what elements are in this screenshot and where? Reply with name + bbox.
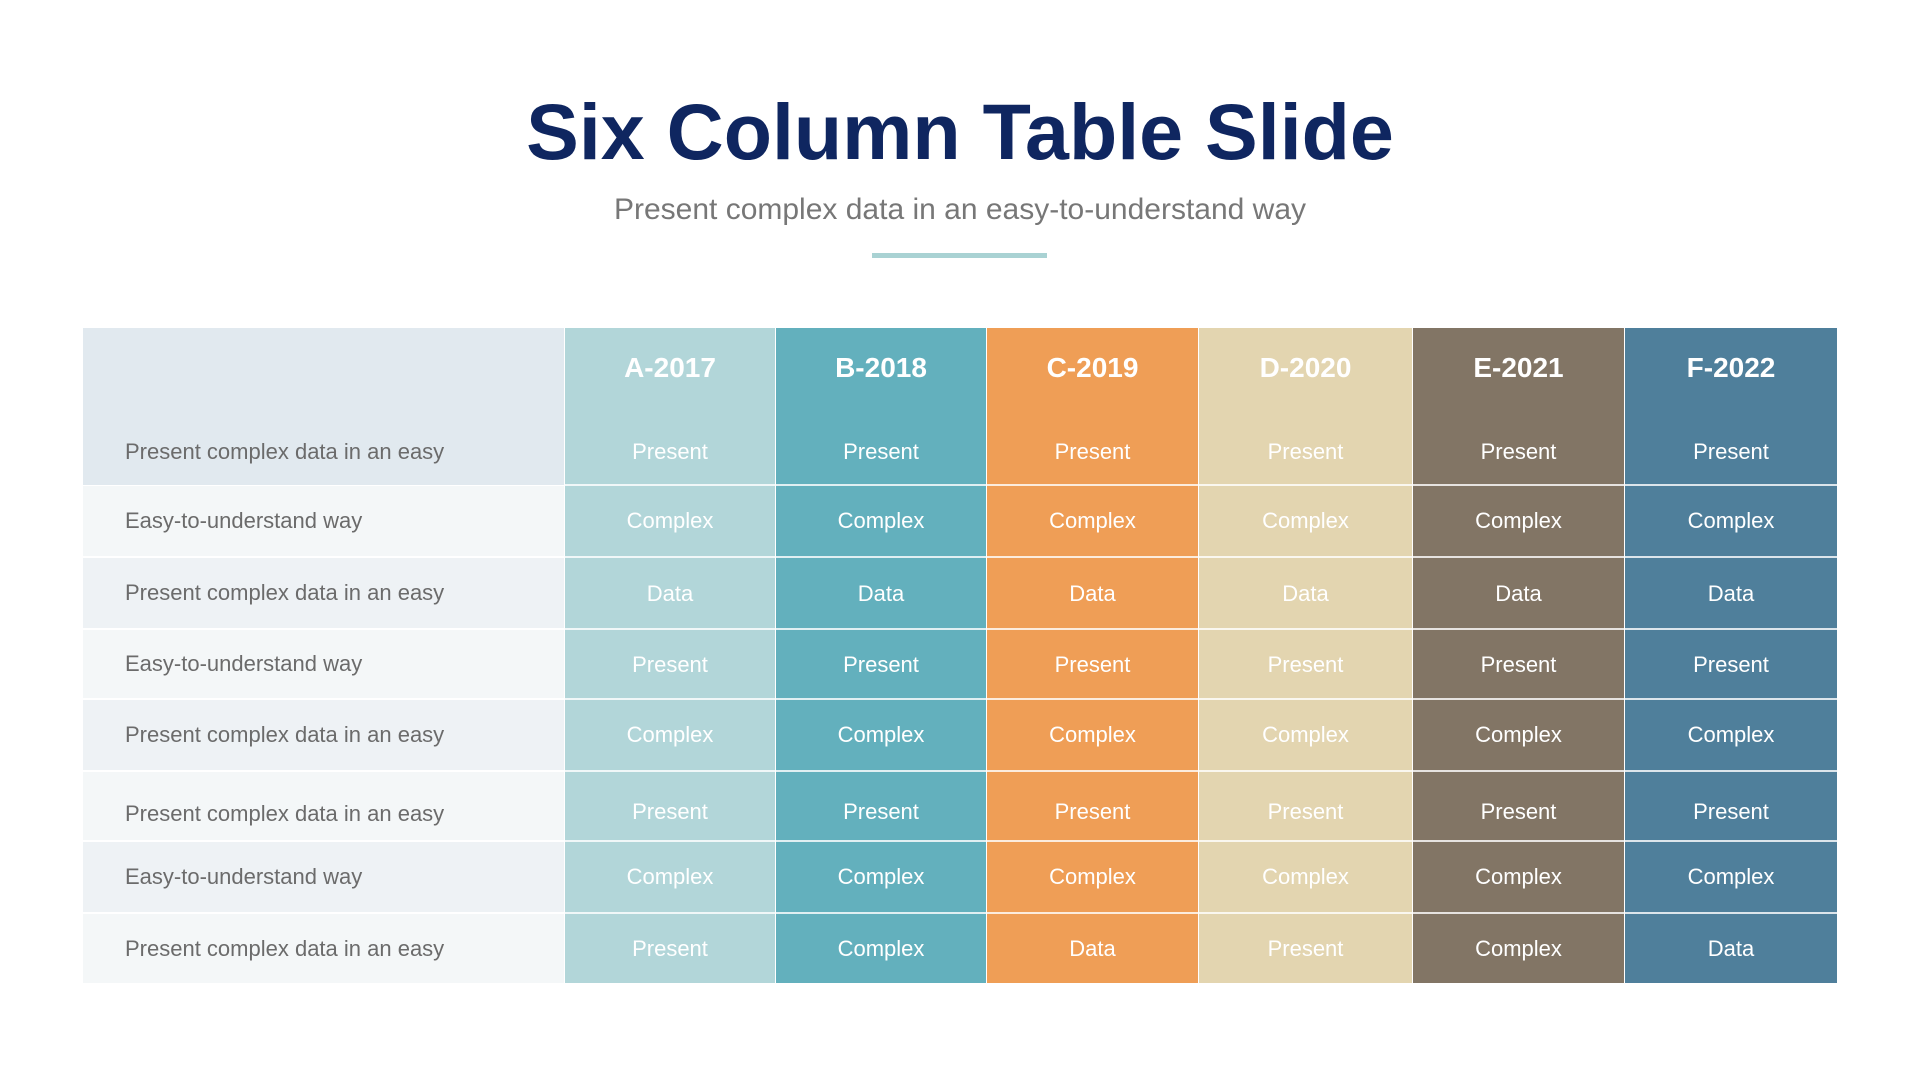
text: Present — [1268, 936, 1343, 961]
label column: Easy-to-understand way — [125, 508, 362, 533]
text: Present — [1055, 799, 1130, 824]
text: Complex — [1688, 722, 1774, 747]
column D — [1199, 328, 1412, 983]
text: Present — [632, 799, 708, 824]
column F — [1625, 328, 1837, 983]
label column: Present complex data in an easy — [125, 936, 444, 960]
text: Data — [1708, 581, 1754, 606]
text: Complex — [838, 508, 924, 533]
text: Present — [1055, 439, 1130, 464]
text: Complex — [1475, 722, 1562, 747]
label column: Present complex data in an easy — [125, 580, 444, 605]
text: Complex — [838, 936, 924, 961]
text: Present — [632, 936, 708, 961]
text: Present — [1055, 652, 1130, 677]
text: Present — [843, 652, 919, 677]
text: Complex — [627, 722, 713, 747]
label column: Present complex data in an easy — [125, 801, 444, 826]
text: Complex — [838, 722, 924, 747]
text: Complex — [1049, 508, 1136, 533]
column B — [776, 328, 986, 983]
text: Present — [1481, 799, 1556, 824]
headers: A-2017 — [624, 352, 716, 383]
label column: Easy-to-understand way — [125, 651, 362, 676]
text: Data — [1282, 581, 1329, 606]
text: Data — [858, 581, 904, 606]
label column — [83, 328, 564, 983]
headers — [624, 352, 1775, 383]
text: Data — [1069, 581, 1116, 606]
text: Present — [1481, 652, 1556, 677]
text: Complex — [1049, 864, 1136, 889]
text: Present — [1693, 439, 1769, 464]
text: Complex — [1262, 864, 1349, 889]
text: Data — [1069, 936, 1116, 961]
text: Complex — [1049, 722, 1136, 747]
text: Complex — [1688, 864, 1774, 889]
text: Present — [1693, 799, 1769, 824]
cell values — [627, 439, 1774, 961]
text: Present — [1481, 439, 1556, 464]
text: Present — [1268, 799, 1343, 824]
text: Data — [1708, 936, 1754, 961]
text: Present — [632, 652, 708, 677]
column C — [987, 328, 1198, 983]
text: Present — [632, 439, 708, 464]
text: Present — [843, 439, 919, 464]
subtitle: Present complex data in an easy-to-understand way — [614, 193, 1306, 226]
column E — [1413, 328, 1624, 983]
label column: Present complex data in an easy — [125, 439, 444, 464]
text: Present — [1693, 652, 1769, 677]
label column: Present complex data in an easy — [125, 722, 444, 747]
text: Complex — [1262, 508, 1349, 533]
text: Complex — [1475, 864, 1562, 889]
text: Present — [1268, 439, 1343, 464]
text: Complex — [1688, 508, 1774, 533]
text: Complex — [838, 864, 924, 889]
text: Complex — [627, 864, 713, 889]
label column: Easy-to-understand way — [125, 864, 362, 889]
text: Data — [1495, 581, 1542, 606]
text: Complex — [1475, 508, 1562, 533]
text: Data — [647, 581, 693, 606]
text: Complex — [1262, 722, 1349, 747]
headers: F-2022 — [1687, 352, 1775, 383]
headers: E-2021 — [1473, 352, 1564, 383]
title: Six Column Table Slide — [526, 87, 1394, 176]
column A — [565, 328, 775, 983]
text: Present — [1268, 652, 1343, 677]
text: Complex — [1475, 936, 1562, 961]
headers: B-2018 — [835, 352, 927, 383]
text: Complex — [627, 508, 713, 533]
headers: D-2020 — [1260, 352, 1351, 383]
text: Present — [843, 799, 919, 824]
headers: C-2019 — [1047, 352, 1138, 383]
